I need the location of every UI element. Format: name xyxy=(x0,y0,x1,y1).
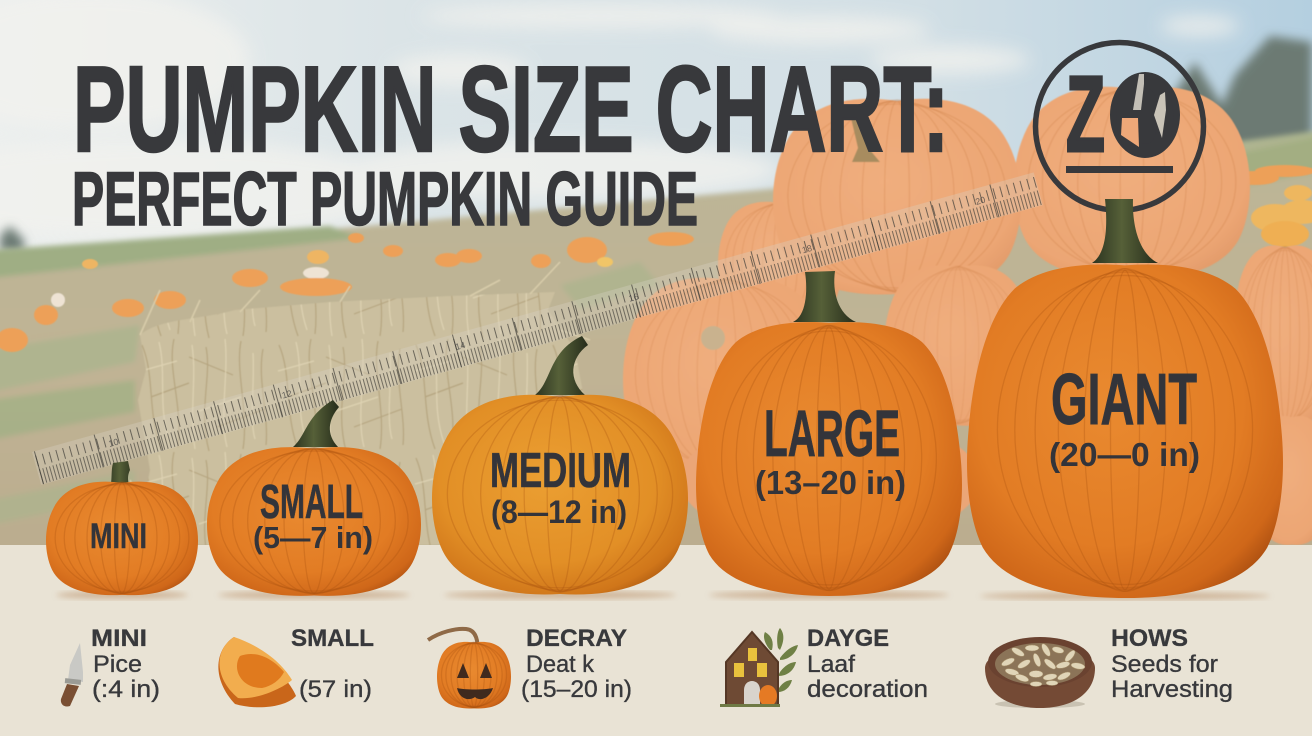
floor shadows xyxy=(56,591,1270,600)
background: sky xyxy=(0,0,1312,270)
text: mini: Pice xyxy=(93,651,142,678)
ruler: 16 xyxy=(627,291,640,304)
text: dayge: decoration xyxy=(807,676,928,703)
pumpkin: giant: (20—0 in) xyxy=(1049,436,1200,473)
pumpkin: small xyxy=(207,400,421,596)
text: decray: (15–20 in) xyxy=(521,676,632,703)
icon: house with leaf xyxy=(720,628,798,707)
icon: knife xyxy=(61,643,83,707)
subtitle: PERFECT PUMPKIN GUIDE xyxy=(72,157,698,242)
ruler: 14 xyxy=(454,340,466,352)
pumpkin: mini: MINI xyxy=(90,517,147,556)
text: hows: Seeds for xyxy=(1111,651,1218,678)
icon: bowl of seeds xyxy=(985,637,1095,708)
ruler xyxy=(32,172,1043,485)
background: hay bale xyxy=(130,262,590,545)
text: dayge: DAYGE xyxy=(807,625,889,652)
pumpkin: large: (13–20 in) xyxy=(755,464,906,501)
text: dayge: Laaf xyxy=(807,651,855,678)
text: small: SMALL xyxy=(291,625,374,652)
badge: 20 in circle xyxy=(1036,42,1204,210)
text: small: (57 in) xyxy=(299,676,372,703)
pumpkin: medium: (8—12 in) xyxy=(491,494,627,530)
text: mini xyxy=(91,625,160,703)
pumpkin: giant xyxy=(967,199,1283,598)
text: mini: MINI xyxy=(91,625,147,652)
text: decray: Deat k xyxy=(526,651,595,678)
badge: 20 in circle: Z xyxy=(1066,53,1105,174)
pumpkin: large: LARGE xyxy=(764,396,900,470)
text: mini: (:4 in) xyxy=(92,676,160,703)
background: pumpkin pile xyxy=(623,87,1312,545)
text: decray: DECRAY xyxy=(526,625,627,652)
icon: jack-o-lantern xyxy=(428,629,511,709)
ruler: 20 xyxy=(974,195,987,207)
text: hows: Harvesting xyxy=(1111,676,1233,703)
ruler: 18 xyxy=(801,243,813,255)
badge: 20 in circle: 0 xyxy=(1112,54,1178,179)
pumpkin: giant: GIANT xyxy=(1051,360,1197,440)
pumpkin: large xyxy=(696,271,962,596)
text: hows: HOWS xyxy=(1111,625,1188,652)
pumpkin: mini xyxy=(46,461,198,595)
background: tree line xyxy=(0,36,1312,252)
pumpkin: small: SMALL xyxy=(260,476,363,529)
text: hows xyxy=(1111,625,1233,703)
text: dayge xyxy=(807,625,928,703)
icon: pumpkin slice xyxy=(218,637,296,707)
background: harvest field xyxy=(0,130,1312,560)
background: small field pumpkins xyxy=(0,165,1312,352)
ruler: 12 xyxy=(281,388,293,400)
pumpkin: medium: MEDIUM xyxy=(490,444,631,498)
pumpkin: small: (5—7 in) xyxy=(253,520,373,555)
background: clouds xyxy=(0,0,1240,240)
background: floor table xyxy=(0,545,1312,736)
ruler: 10 xyxy=(107,437,120,449)
pumpkin: medium xyxy=(432,336,688,595)
text: small xyxy=(291,625,374,703)
text: decray xyxy=(521,625,632,703)
